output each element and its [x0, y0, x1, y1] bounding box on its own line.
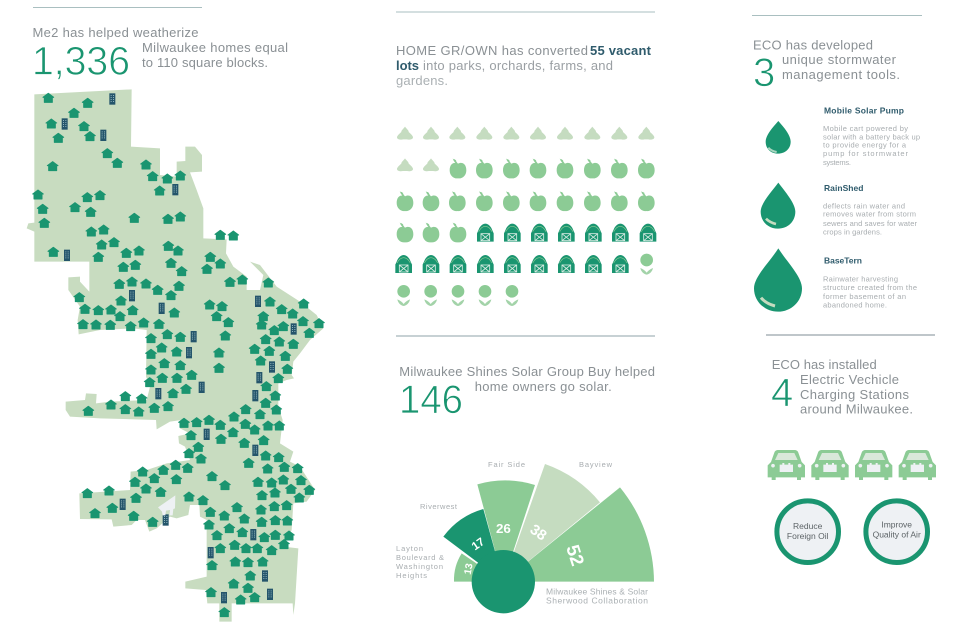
barns — [395, 224, 656, 273]
houses north — [33, 93, 309, 321]
chart labels: Boulevard & — [396, 553, 444, 562]
apartment buildings south — [120, 323, 297, 603]
heading: stormwater: unique stormwater — [782, 52, 897, 67]
map of Milwaukee — [27, 89, 324, 622]
heading: weatherize: Milwaukee homes equal — [142, 40, 288, 55]
pale highlighted house — [158, 495, 175, 515]
heading: stormwater — [753, 37, 900, 95]
tool: Mobile Solar Pump: pump for stormwater — [823, 149, 908, 158]
wedge 13 — [454, 553, 503, 582]
heading: solar: 146 — [399, 378, 463, 422]
wedge values: 52 — [562, 542, 589, 568]
tool: RainShed: removes water from storm — [823, 210, 916, 219]
chart labels — [396, 460, 648, 606]
chart labels: Washington — [396, 562, 443, 571]
tool: BaseTern: structure created from the — [823, 283, 917, 292]
divider lines — [33, 8, 935, 336]
wedge values — [463, 521, 589, 576]
wedge values: 26 — [496, 521, 511, 536]
panel: EV charging — [768, 357, 936, 562]
tool: BaseTern: abandoned home. — [823, 301, 887, 310]
heading: EV stations: Charging Stations — [800, 387, 910, 402]
map shape — [27, 89, 323, 622]
chart labels: Sherwood Collaboration — [546, 596, 648, 606]
heading: weatherize: 1,336 — [32, 40, 130, 84]
wedge values: 17 — [470, 536, 487, 553]
heading: vacant lots: into parks, orchards, farms, and — [423, 58, 613, 73]
badge: reduce foreign oil: Foreign Oil — [787, 531, 829, 541]
tool: Mobile Solar Pump: solar with a battery back up — [823, 132, 920, 141]
panel: solar group buy — [396, 364, 655, 613]
heading: EV stations: around Milwaukee. — [800, 401, 913, 416]
chart labels: Fair Side — [488, 460, 525, 469]
chart labels: Bayview — [579, 460, 613, 469]
wedge values: 13 — [463, 562, 476, 576]
tool: BaseTern: former basement of an — [823, 292, 906, 301]
heading: stormwater: 3 — [753, 51, 775, 95]
pictogram grid of 55 lots — [395, 127, 656, 306]
tool: BaseTern — [754, 248, 917, 312]
tool: RainShed: RainShed — [824, 183, 864, 193]
heading: vacant lots: gardens. — [396, 73, 448, 88]
fan chart — [443, 464, 654, 613]
badge: improve air quality: Quality of Air — [873, 529, 921, 539]
heading: EV stations: 4 — [771, 371, 793, 415]
trees — [397, 127, 654, 171]
panel: stormwater tools — [753, 37, 920, 312]
panel: vacant lots — [395, 43, 656, 306]
tool: RainShed: crops in gardens. — [823, 227, 882, 236]
badge: reduce foreign oil — [777, 501, 838, 562]
tool: RainShed: deflects rain water and — [823, 202, 905, 211]
tool: RainShed: sewers and saves for water — [823, 219, 918, 228]
wedge 26 — [477, 480, 535, 582]
heading: weatherize: to 110 square blocks. — [142, 55, 268, 70]
heading: EV stations: ECO has installed — [772, 357, 877, 372]
apples — [397, 159, 655, 242]
heading: EV stations — [771, 357, 913, 416]
chart labels: Riverwest — [420, 502, 458, 511]
icon: large drop — [754, 248, 802, 312]
panel: weatherization — [27, 25, 324, 622]
tool: Mobile Solar Pump — [766, 106, 920, 167]
heading: solar: Milwaukee Shines Solar Group Buy helped — [399, 364, 655, 379]
badge: reduce foreign oil: Reduce — [793, 521, 823, 531]
tool: BaseTern: BaseTern — [824, 256, 862, 266]
badge: improve air quality: Improve — [881, 519, 912, 529]
heading: stormwater: management tools. — [782, 67, 900, 82]
heading: vacant lots: 55 vacant — [590, 43, 652, 58]
heading: vacant lots: HOME GR/OWN has converted — [396, 43, 588, 58]
heading: vacant lots — [396, 43, 652, 88]
wedge 17 — [443, 509, 503, 582]
heading: vacant lots: lots — [396, 58, 419, 73]
heading: solar: home owners go solar. — [475, 379, 612, 394]
heading: weatherize: Me2 has helped weatherize — [32, 25, 198, 40]
heading: EV stations: Electric Vechicle — [800, 372, 899, 387]
chart labels: Milwaukee Shines & Solar — [546, 586, 648, 596]
apartment buildings north — [62, 93, 261, 314]
tool: Mobile Solar Pump: Mobile cart powered by — [823, 124, 908, 133]
wedge 38 — [503, 464, 600, 582]
chart labels: Layton — [396, 544, 423, 553]
heading: stormwater: ECO has developed — [753, 37, 873, 52]
centre circle — [472, 550, 535, 613]
flowers — [397, 254, 653, 306]
tool: Mobile Solar Pump: to provide energy for a — [823, 141, 907, 150]
tool: Mobile Solar Pump: systems. — [823, 158, 851, 167]
chart labels: Heights — [396, 571, 427, 580]
badge: improve air quality — [866, 501, 928, 562]
heading: solar — [399, 364, 655, 422]
tool: RainShed — [761, 183, 918, 236]
wedge values: 38 — [527, 522, 549, 544]
icon: small drop — [766, 121, 791, 154]
tool: BaseTern: Rainwater harvesting — [823, 275, 898, 284]
houses south — [78, 317, 324, 617]
tool: Mobile Solar Pump: Mobile Solar Pump — [824, 106, 904, 116]
heading: weatherize — [32, 25, 288, 84]
icon: medium drop — [761, 183, 795, 229]
wedge 52 — [503, 487, 654, 582]
icon: electric cars — [768, 450, 936, 480]
